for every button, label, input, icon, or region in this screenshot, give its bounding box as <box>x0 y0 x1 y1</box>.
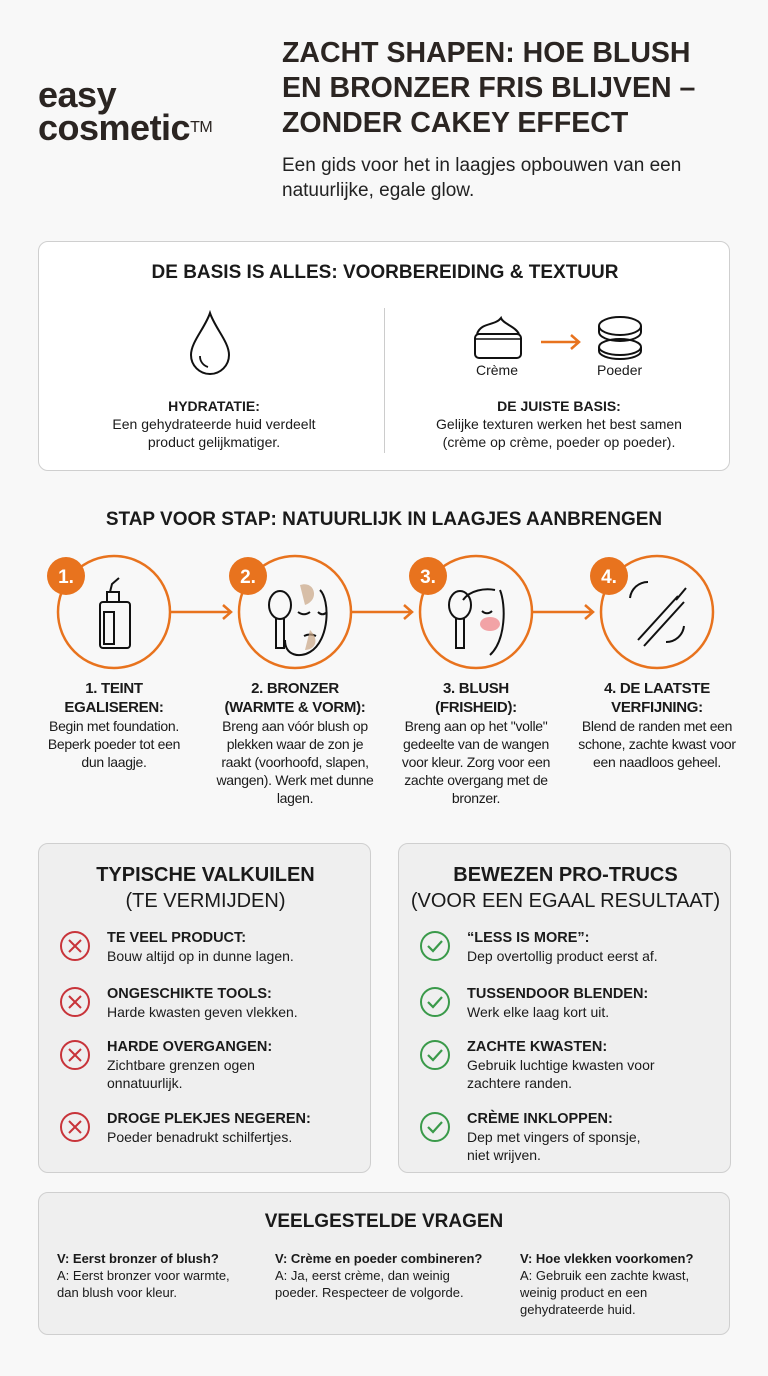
text: juiste basis: Gelijke texturen werken het best samen <box>436 416 682 432</box>
faq 3: gehydrateerde huid. <box>520 1302 636 1317</box>
item: Harde kwasten geven vlekken. <box>107 1004 298 1020</box>
step 2: (WARMTE & VORM): <box>224 699 366 716</box>
faq 1: V: Eerst bronzer of blush? <box>57 1251 219 1266</box>
item: Zichtbare grenzen ogen <box>107 1057 255 1073</box>
step 4: 4. DE LAATSTE <box>604 680 710 697</box>
text: hydratatie <box>112 398 316 450</box>
steps diagram: 3. <box>420 567 436 588</box>
item: TUSSENDOOR BLENDEN: <box>467 986 648 1002</box>
faq 2: V: Crème en poeder combineren? <box>275 1251 482 1266</box>
steps diagram: 1. <box>58 567 74 588</box>
item: niet wrijven. <box>467 1147 541 1163</box>
faq 1: A: Eerst bronzer voor warmte, <box>57 1268 230 1283</box>
panel: pro-trucs <box>398 843 731 1173</box>
faq 2: poeder. Respecteer de volgorde. <box>275 1285 464 1300</box>
logo: easy <box>38 74 116 115</box>
step 4: Blend de randen met een schone, zachte kwast voor een naadloos geheel. <box>578 718 736 770</box>
title: ZACHT SHAPEN: HOE BLUSH EN BRONZER FRIS BLIJVEN – ZONDER CAKEY EFFECT <box>282 37 695 139</box>
item: DROGE PLEKJES NEGEREN: <box>107 1111 311 1127</box>
item <box>420 1110 641 1163</box>
item <box>60 986 298 1020</box>
step 1: EGALISEREN: <box>64 699 164 716</box>
step 3: Breng aan op het "volle" gedeelte van de wangen voor kleur. Zorg voor een zachte overgang met de bronzer. <box>402 718 550 806</box>
faq 3: weinig product en een <box>520 1285 647 1300</box>
step 3: 3. BLUSH <box>443 680 509 697</box>
text: hydratatie: product gelijkmatiger. <box>148 434 280 450</box>
logo <box>38 74 212 148</box>
heading: pro-trucs: (VOOR EEN EGAAL RESULTAAT) <box>411 890 720 912</box>
heading: pro-trucs: BEWEZEN PRO-TRUCS <box>453 864 678 886</box>
panel: faq <box>38 1192 730 1335</box>
subtitle: Een gids voor het in laagjes opbouwen van een natuurlijke, egale glow. <box>282 155 681 201</box>
item <box>420 986 648 1020</box>
faq 1 <box>57 1251 230 1300</box>
icon: creme to poeder <box>474 316 642 360</box>
steps diagram: 2. <box>240 567 256 588</box>
panel: valkuilen <box>38 843 371 1173</box>
item: zachtere randen. <box>467 1075 572 1091</box>
step 4 <box>578 680 736 770</box>
step 1 <box>48 680 180 770</box>
icon: water drop <box>190 310 230 375</box>
item <box>420 930 658 964</box>
text: juiste basis: (crème op crème, poeder op poeder). <box>443 434 675 450</box>
steps diagram <box>47 554 714 670</box>
faq 2: A: Ja, eerst crème, dan weinig <box>275 1268 450 1283</box>
heading: pro-trucs <box>411 864 720 912</box>
item: “LESS IS MORE”: <box>467 930 589 946</box>
item: Bouw altijd op in dunne lagen. <box>107 948 294 964</box>
item <box>60 930 294 964</box>
step 3 <box>402 680 550 806</box>
step 4: VERFIJNING: <box>611 699 703 716</box>
item <box>60 1111 311 1145</box>
item: TE VEEL PRODUCT: <box>107 930 246 946</box>
faq 3: V: Hoe vlekken voorkomen? <box>520 1251 693 1266</box>
heading: valkuilen <box>96 864 315 912</box>
item: ONGESCHIKTE TOOLS: <box>107 986 272 1002</box>
faq 3 <box>520 1251 693 1317</box>
label: creme: Crème <box>476 362 518 378</box>
step 1: 1. TEINT <box>85 680 143 697</box>
heading: faq: VEELGESTELDE VRAGEN <box>265 1211 503 1232</box>
text: hydratatie: Een gehydrateerde huid verdeelt <box>112 416 316 432</box>
item: Dep overtollig product eerst af. <box>467 948 658 964</box>
step 2: Breng aan vóór blush op plekken waar de zon je raakt (voorhoofd, slapen, wangen). Werk met dunne lagen. <box>216 718 374 806</box>
heading: valkuilen: (TE VERMIJDEN) <box>126 890 286 912</box>
steps diagram: 4. <box>601 567 617 588</box>
text: juiste basis: DE JUISTE BASIS: <box>497 398 621 414</box>
faq 1: dan blush voor kleur. <box>57 1285 177 1300</box>
step 2: 2. BRONZER <box>251 680 339 697</box>
heading: basis: DE BASIS IS ALLES: VOORBEREIDING & TEXTUUR <box>152 262 618 283</box>
faq 2 <box>275 1251 482 1300</box>
step 3: (FRISHEID): <box>435 699 517 716</box>
item: Poeder benadrukt schilfertjes. <box>107 1129 292 1145</box>
label: poeder: Poeder <box>597 362 642 378</box>
item <box>420 1039 655 1091</box>
step 1: Begin met foundation. Beperk poeder tot een dun laagje. <box>48 718 180 770</box>
panel: basis <box>38 241 730 471</box>
text: juiste basis <box>436 398 682 450</box>
item: ZACHTE KWASTEN: <box>467 1039 607 1055</box>
heading: stap voor stap: STAP VOOR STAP: NATUURLIJK IN LAAGJES AANBRENGEN <box>106 509 662 530</box>
item <box>60 1039 272 1091</box>
item: Gebruik luchtige kwasten voor <box>467 1057 655 1073</box>
item: CRÈME INKLOPPEN: <box>467 1111 613 1127</box>
heading: valkuilen: TYPISCHE VALKUILEN <box>96 864 315 886</box>
faq 3: A: Gebruik een zachte kwast, <box>520 1268 689 1283</box>
logo: cosmeticTM <box>38 107 212 148</box>
item: HARDE OVERGANGEN: <box>107 1039 272 1055</box>
step 2 <box>216 680 374 806</box>
item: Werk elke laag kort uit. <box>467 1004 609 1020</box>
item: onnatuurlijk. <box>107 1075 182 1091</box>
text: hydratatie: HYDRATATIE: <box>168 398 260 414</box>
item: Dep met vingers of sponsje, <box>467 1129 641 1145</box>
